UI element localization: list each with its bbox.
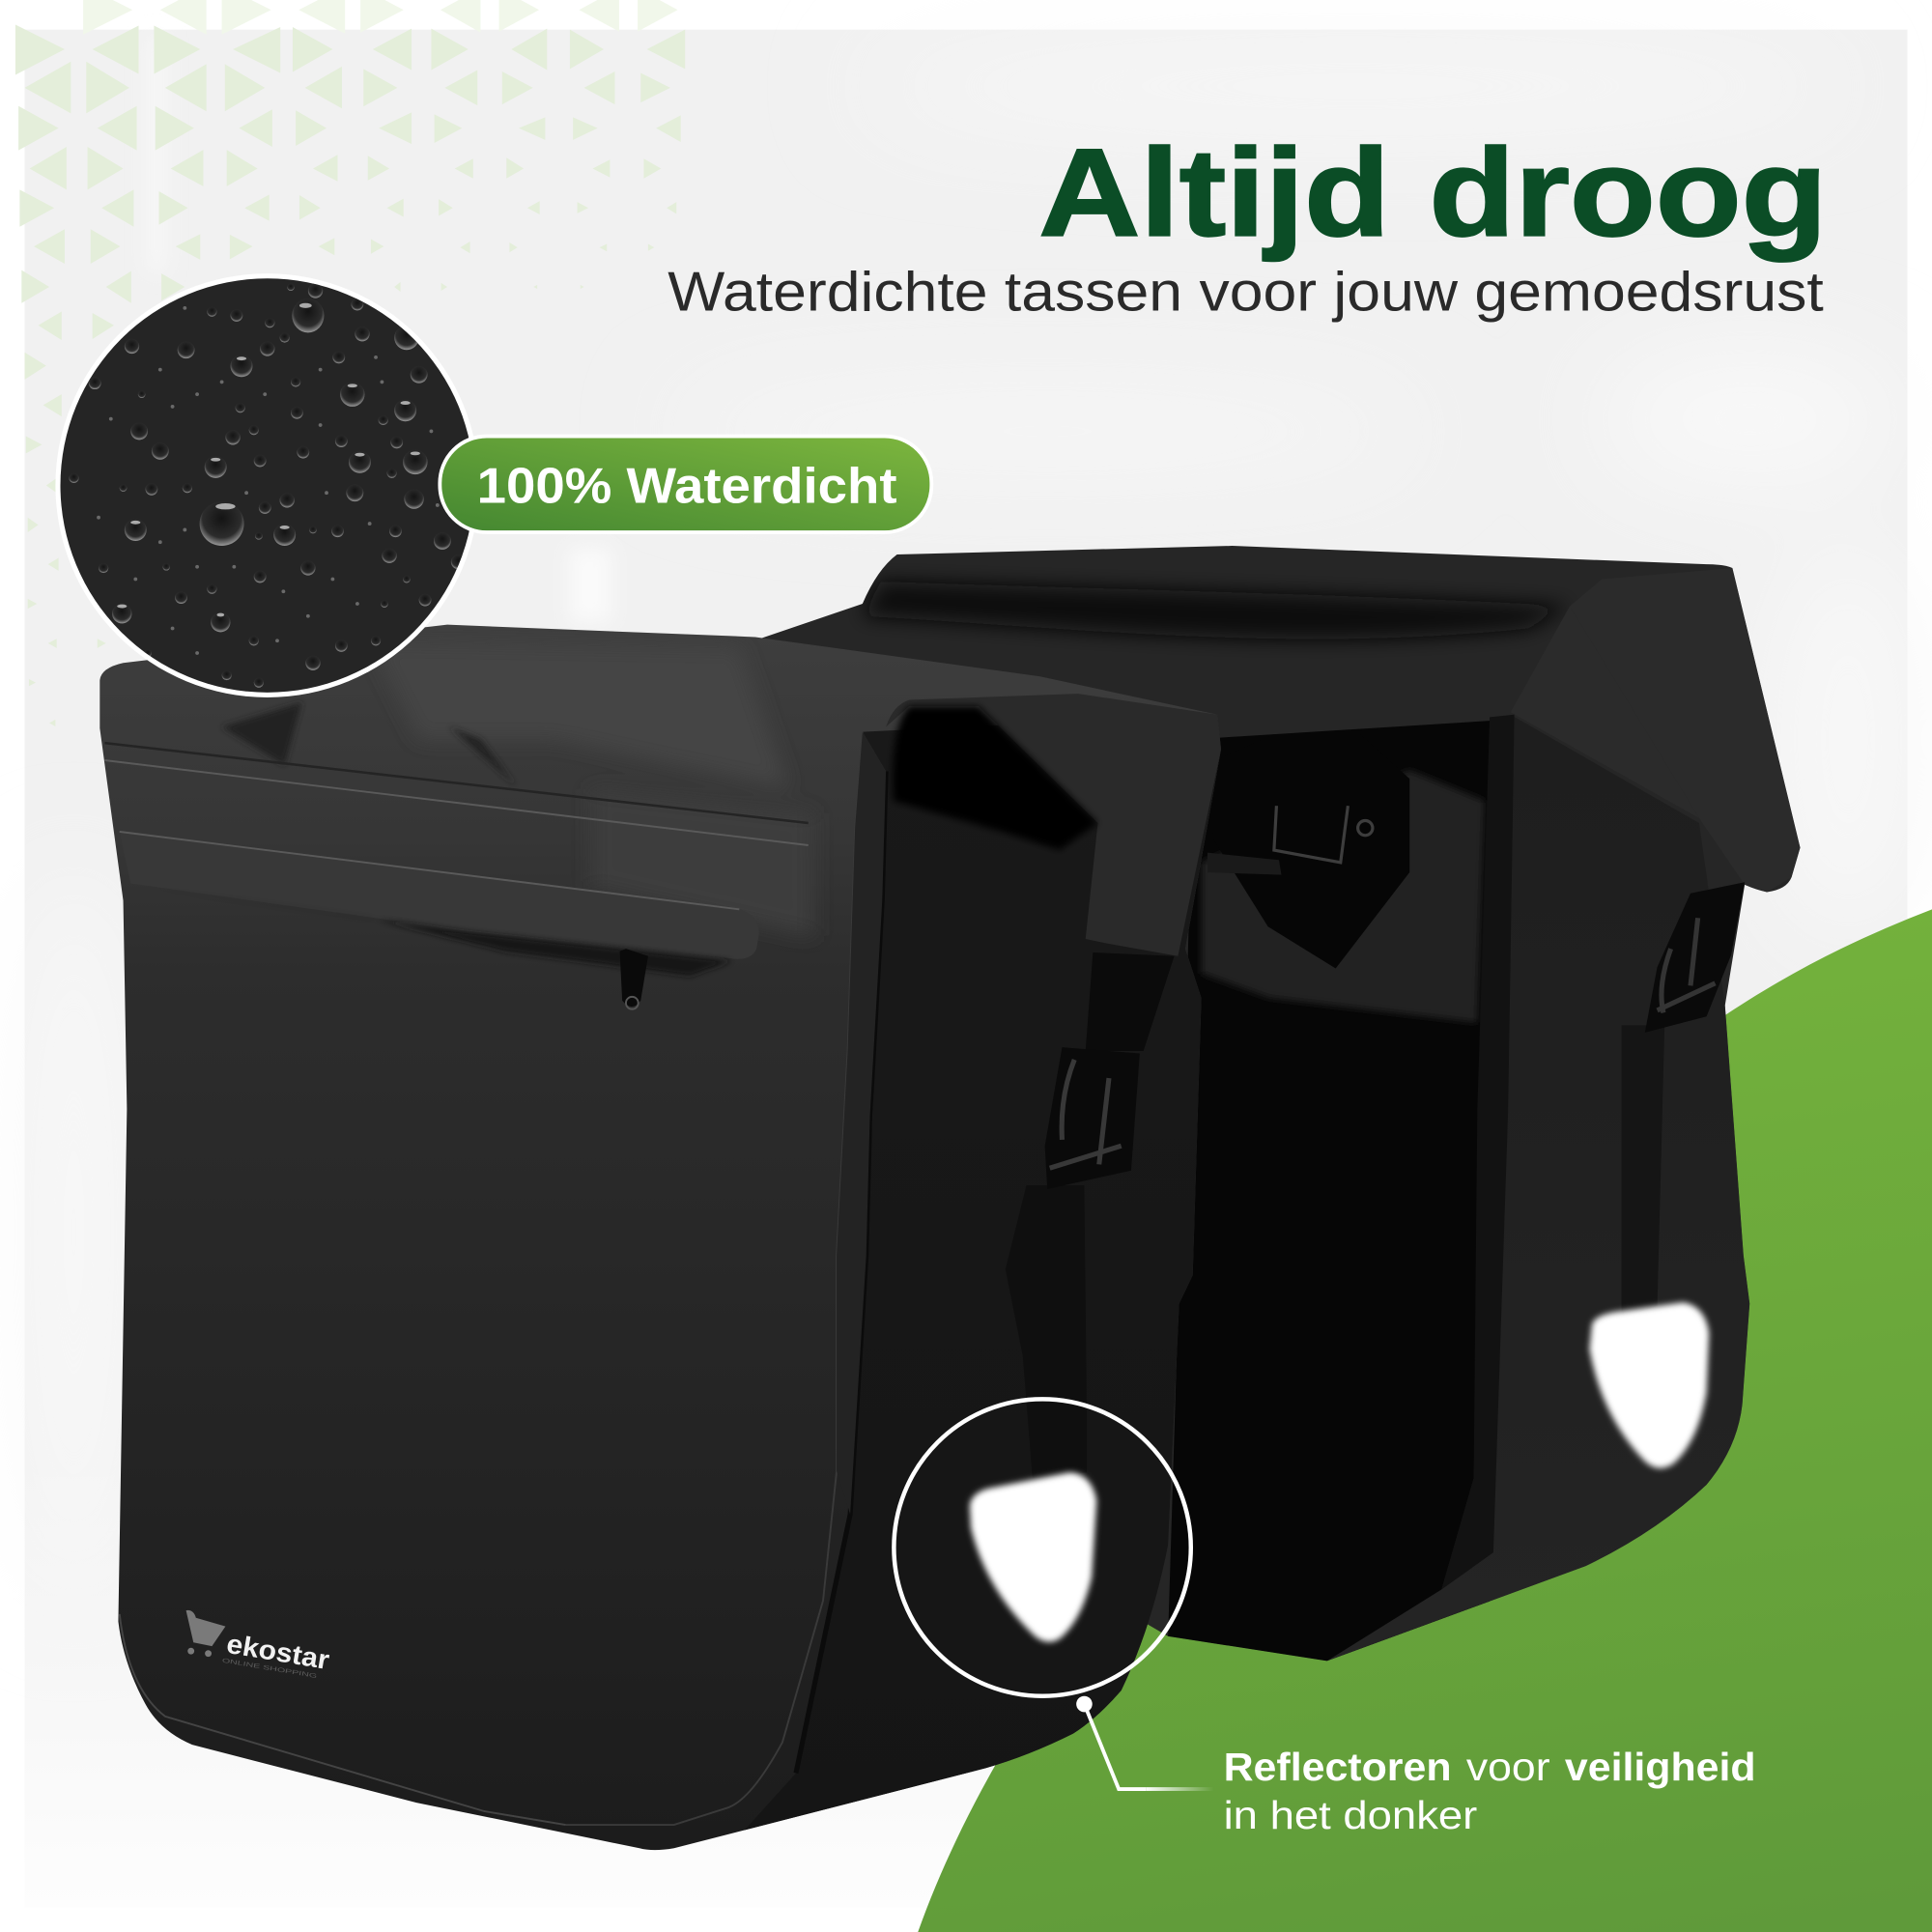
- callout text: [1224, 1745, 1756, 1837]
- front roll fold: [886, 694, 1221, 956]
- zipper shadow: [130, 885, 732, 976]
- badge: 100% Waterdicht: [440, 437, 931, 532]
- green curved shape: [918, 909, 1932, 1932]
- gap between panniers: [1168, 721, 1490, 1661]
- rear roll top shadow fold: [863, 582, 1570, 639]
- callout text: veiligheid: [1565, 1745, 1756, 1789]
- triangle pattern: [15, 0, 685, 726]
- rear buckle: [1645, 882, 1745, 1033]
- seal band lines: [104, 743, 809, 823]
- rear upper corner: [1560, 609, 1569, 624]
- droplet highlights: [117, 303, 420, 616]
- rear side panel: [1327, 1005, 1750, 1661]
- water droplets: [69, 283, 466, 688]
- badge: 100% Waterdicht: 100% Waterdicht: [477, 458, 897, 514]
- reflector highlight ring: [894, 1399, 1191, 1696]
- zipper pull: [620, 949, 648, 1009]
- reflector: rear pannier: [1589, 1302, 1709, 1468]
- reflector: front pannier: [970, 1472, 1096, 1642]
- front strap top: [1086, 952, 1175, 1051]
- product logo: ekostar: [186, 1610, 331, 1680]
- product logo: ekostar: ekostar: [224, 1629, 331, 1675]
- subtitle: Waterdichte tassen voor jouw gemoedsrust: [668, 261, 1824, 323]
- callout text: voor: [1466, 1745, 1550, 1789]
- water droplet fabric close-up: [55, 273, 479, 697]
- callout text: Reflectoren: [1224, 1745, 1452, 1789]
- product photo: front pannier: [99, 625, 1221, 1850]
- rear strap: [1622, 1025, 1664, 1319]
- bracket shadow: [1221, 773, 1410, 968]
- flap soft light patches: [394, 656, 812, 931]
- product photo: rear pannier: [754, 546, 1801, 1661]
- rear fold flap: [1732, 568, 1801, 893]
- roll hollow: [893, 706, 1097, 850]
- bracket strap: [1208, 853, 1282, 875]
- rear seam strip: [1441, 715, 1515, 1589]
- front strap: [1006, 1185, 1087, 1479]
- cart icon: [186, 1610, 225, 1657]
- title: Altijd droog: [1038, 124, 1828, 263]
- product logo: ekostar: ONLINE SHOPPING: [221, 1658, 318, 1680]
- callout leader line: [1076, 1696, 1213, 1791]
- flap fold creases: [224, 702, 508, 777]
- gap upper lit area: [1202, 770, 1485, 1023]
- seam band: [837, 732, 886, 1515]
- tiny droplet specks: [97, 306, 440, 655]
- front buckle: [1045, 1047, 1140, 1189]
- zipper flap: [459, 896, 757, 958]
- side panel: [739, 715, 1221, 1836]
- bottom curved seam: [120, 1614, 565, 1825]
- callout text: in het donker: [1224, 1793, 1477, 1837]
- side panel seam: [565, 732, 863, 1825]
- metal bracket: [1274, 806, 1373, 863]
